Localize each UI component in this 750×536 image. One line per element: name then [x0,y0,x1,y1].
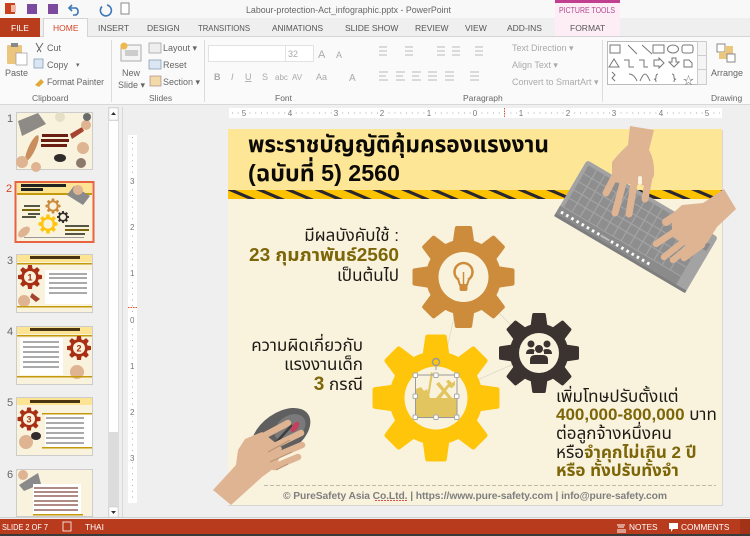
ribbon tabs: INSERT [98,23,129,33]
clipboard group: ▾ [76,62,80,69]
clipboard group: Clipboard [32,93,69,103]
thumbnail 6 [7,469,92,516]
clipboard group: Copy [47,60,69,70]
slides group: New [122,68,141,78]
horizontal ruler: 2 [566,109,571,118]
thumbnail 4 [7,326,92,384]
title: (ฉบับที่ 5) 2560 [248,157,400,186]
mouse [242,398,320,468]
icon: notes [617,525,626,532]
ribbon tabs [0,18,750,38]
ribbon tabs: REVIEW [415,23,449,33]
slides group: Reset [163,60,187,70]
horizontal ruler: 3 [612,109,617,118]
text block: child labour [251,333,363,395]
font group [208,46,356,103]
selection handles [413,358,459,420]
shapes gallery: ☆ [683,74,694,87]
thumbnail 2 selected: 2 [6,183,12,195]
thumbnail 3 [7,254,92,312]
horizontal ruler: 2 [380,109,385,118]
clipboard group: Paste [5,68,28,78]
font group: S [262,72,268,82]
text block: penalty: หรือจำคุกไม่เกิน 2 ปี [556,442,696,463]
ribbon tabs: FORMAT [570,23,605,33]
text block: penalty: 400,000-800,000 บาท [556,405,717,424]
picture tools tab [555,0,620,36]
title: พระราชบัญญัติคุ้มครองแรงงาน [248,131,549,158]
header band [228,129,722,190]
slide background [228,129,722,505]
horizontal ruler: 1 [427,109,432,118]
illustration: keyboard and hands [554,126,736,293]
text block: penalty [556,385,717,480]
thumbnail panel [6,107,119,517]
slides group [118,42,201,103]
horizontal ruler [229,108,722,118]
drawing group: Arrange [711,68,743,78]
thumbnail 3: 3 [7,255,13,267]
horizontal ruler: 0 [473,109,478,118]
vertical ruler: 0 [130,316,135,325]
thumbnail 5 [7,397,92,456]
horizontal ruler: 5 [242,109,247,118]
keyboard [554,160,718,293]
status bar [0,517,750,536]
font group: AV [292,73,303,82]
icon: comments [669,523,678,532]
icon: print preview [121,3,129,14]
status bar: SLIDE 2 OF 7 [2,522,48,532]
hand [213,423,302,505]
ribbon tabs: VIEW [465,23,487,33]
icon: copy [34,59,43,68]
slide [213,126,736,506]
clipboard group: Format Painter [47,77,104,87]
footer dashed line [264,484,716,486]
clipboard group [5,43,104,103]
slides group: Layout ▾ [163,43,198,53]
title bar [0,0,750,18]
thumbnail 5: 5 [7,397,13,409]
ribbon tabs: ANIMATIONS [272,23,323,33]
gear: effective date (bulb) [415,228,512,326]
text block: child labour: ความผิดเกี่ยวกับ [251,333,363,355]
font group: B [214,72,221,82]
font group: A [336,50,342,60]
slides group: Section ▾ [163,77,201,87]
clipboard group: Cut [47,43,62,53]
horizontal ruler: 5 [705,109,710,118]
icon: PowerPoint logo [5,3,16,14]
horizontal ruler: 4 [288,109,293,118]
thumbnail 6: 6 [7,469,13,481]
icon: light bulb [454,263,472,291]
font group: Aa [316,72,327,82]
status bar: COMMENTS [681,522,730,532]
font group: A [318,49,326,61]
paragraph group: Convert to SmartArt ▾ [512,77,599,87]
vertical ruler [122,107,138,517]
vertical ruler: 3 [130,454,135,463]
home tab [44,18,88,38]
icon: save as [48,4,58,14]
hand: top [606,126,654,214]
font group: 32 [288,49,298,59]
vertical ruler: 3 [130,177,135,186]
illustration: hand on mouse [213,398,320,505]
icon: save [27,4,37,14]
drawing group: Drawing [711,93,742,103]
status bar: THAI [85,522,104,532]
vertical ruler: 1 [130,362,135,371]
text block: effective date [249,225,399,285]
ribbon tabs: TRANSITIONS [198,23,250,33]
hazard stripe [228,190,722,199]
font group: Font [275,93,293,103]
text block: effective date: 23 กุมภาพันธ์2560 [249,245,399,266]
ribbon tabs: DESIGN [147,23,180,33]
file tab: FILE [11,23,29,33]
vertical ruler: 1 [130,269,135,278]
status bar: NOTES [629,522,658,532]
horizontal ruler: 3 [334,109,339,118]
thumbnail 2 selected [6,182,94,242]
document title: Labour-protection-Act_infographic.pptx - PowerPoint [246,5,451,15]
text block: penalty: หรือ ทั้งปรับทั้งจำ [556,459,679,480]
text block: penalty: ต่อลูกจ้างหนึ่งคน [556,421,672,445]
font group: I [231,72,234,82]
thumbnail 4: 2 [76,344,82,354]
title [248,131,549,186]
icon: toolbox [415,372,457,417]
slides group: Slide ▾ [118,80,146,90]
vertical ruler: 2 [130,223,135,232]
ribbon tabs: ADD-INS [507,23,542,33]
connector lines [436,277,539,398]
scrollbar [108,107,119,517]
text block: child labour: แรงงานเด็ก [284,355,363,374]
ribbon tabs: SLIDE SHOW [345,23,398,33]
paragraph group: Text Direction ▾ [512,43,574,53]
horizontal ruler: 1 [519,109,524,118]
horizontal ruler: 4 [659,109,664,118]
gear: child labour (toolbox) [375,337,497,459]
thumbnail 3: 1 [27,272,33,282]
icon: format painter [35,79,44,87]
font group: U [245,72,252,82]
thumbnail 4: 4 [7,326,13,338]
icon: people group [526,340,552,364]
thumbnail 5: 3 [26,414,32,424]
text block: effective date: เป็นต้นไป [337,265,399,285]
paragraph group [379,43,599,103]
font group: abc [275,73,288,82]
file tab [0,18,40,37]
gear: penalty (people) [501,315,577,391]
paragraph group: Paragraph [463,93,503,103]
hand: right [656,189,736,260]
vertical ruler: 2 [130,408,135,417]
paragraph group: Align Text ▾ [512,60,558,70]
icon: undo [69,5,78,15]
font group: A [349,73,356,84]
text block: penalty: เพิ่มโทษปรับตั้งแต่ [556,385,679,406]
icon: redo [100,5,111,16]
icon: cut [36,43,43,52]
slides group: Slides [149,93,172,103]
ribbon body [0,37,750,105]
text block: child labour: 3 กรณี [314,374,363,395]
home tab: HOME [53,23,79,33]
icon: arrange [717,44,735,62]
footer credits: © PureSafety Asia Co.Ltd. | https://www.pure-safety.com | info@pure-safety.com [283,491,667,502]
thumbnail 1 [7,112,92,172]
icon: paste [7,43,27,65]
drawing group [608,42,743,103]
text block: effective date: มีผลบังคับใช้ : [304,225,399,245]
icon: spell check [63,522,71,531]
picture tools tab: PICTURE TOOLS [559,6,615,15]
thumbnail 1: 1 [7,113,13,125]
icon: new slide [120,42,141,61]
